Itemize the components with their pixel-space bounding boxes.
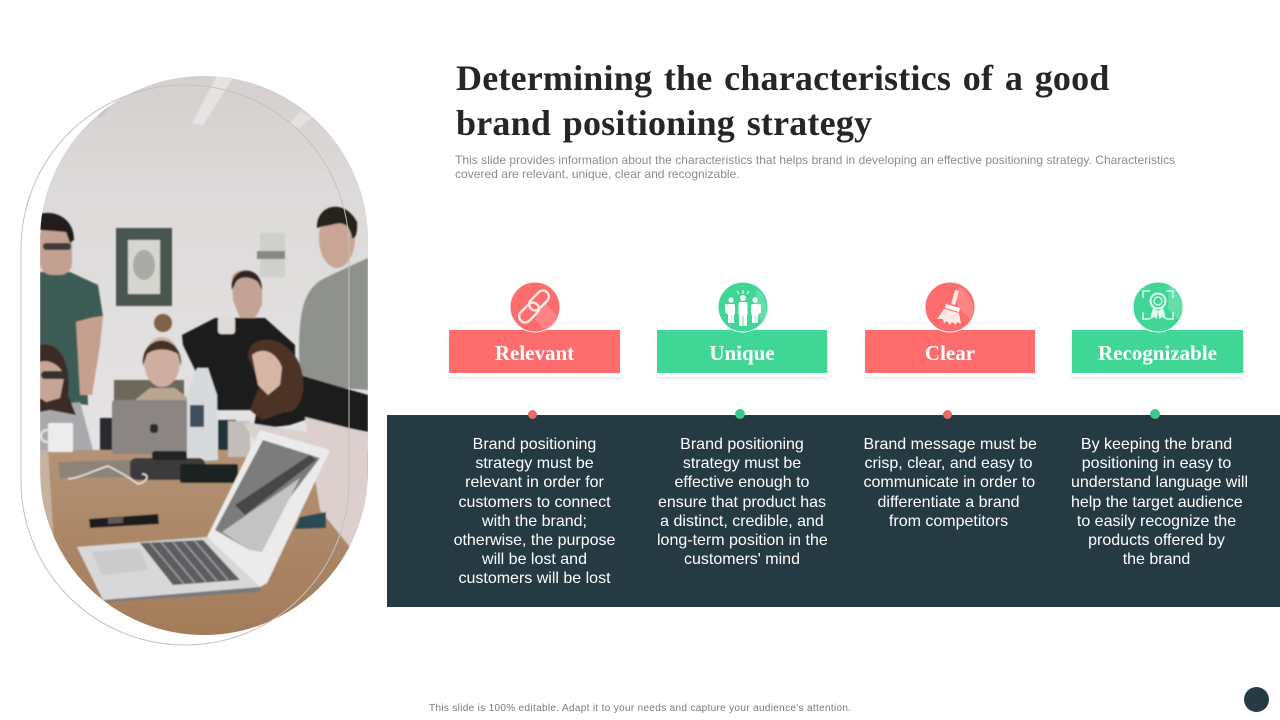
woman left [40,402,93,450]
label: Unique: Unique [709,341,775,365]
marker dot: Clear [942,410,952,418]
title: brand positioning strategy [456,103,872,143]
text: Recognizable description: By keeping the brand [1081,436,1232,453]
marker dot: Recognizable [1150,409,1160,419]
man right [299,258,368,390]
label: Unique [657,330,827,373]
text: Clear description: differentiate a brand [877,494,1020,511]
icon: broom [926,282,974,332]
description: covered are relevant, unique, clear and recognizable. [455,167,740,181]
text: Unique description: Brand positioning [680,436,804,453]
text: Clear description: crisp, clear, and easy to [864,455,1033,472]
label: Clear: Clear [925,341,975,365]
mug and glasses [48,423,73,452]
text: Clear description: Brand message must be [864,436,1037,453]
text: Unique description: ensure that product has [658,494,826,511]
text: Relevant description: will be lost and [482,551,587,568]
back wall items [100,418,112,450]
text: Relevant description: Brand positioning [473,436,596,453]
text: Unique description: long-term position in the [657,532,828,549]
brown-haired woman [253,375,368,432]
icon: three people [718,282,768,332]
text: Relevant description: strategy must be [475,455,594,472]
text: Recognizable description: the brand [1123,551,1190,568]
pink laptop back right [244,422,309,444]
description: This slide provides information about the characteristics that helps brand in developing an effective positioning strategy. Characteristics [455,153,1175,167]
table [40,450,370,640]
label: Relevant [449,330,620,373]
text: Unique description [657,436,828,568]
text: Relevant description: with the brand; [482,513,587,530]
text: Relevant description: relevant in order for [465,474,604,491]
photo: team meeting around a table in a rounded frame [20,76,368,646]
text: Recognizable description: products offered by [1088,532,1225,549]
text: Clear description [864,436,1037,530]
text: Recognizable description: positioning in easy to [1082,455,1231,472]
label: Relevant: Relevant [495,341,574,365]
text: Relevant description [454,436,615,587]
front laptop [77,537,260,600]
title: Determining the characteristics of a good [456,58,1110,98]
woman centre [113,379,185,401]
dark band [387,415,1280,607]
text: Unique description: a distinct, credible, and [660,513,824,530]
text: Recognizable description: help the target audience [1071,494,1243,511]
icon: award ribbon [1134,282,1182,332]
photo outline arc [21,85,349,645]
woman in black [182,318,295,410]
text: Recognizable description: to easily recognize the [1077,513,1236,530]
text: Recognizable description: understand language will [1071,474,1248,491]
label: Recognizable: Recognizable [1098,341,1217,365]
text: Unique description: effective enough to [675,474,809,491]
water bottle [187,368,218,462]
middle laptop [112,400,187,454]
text: Relevant description: customers to connect [458,494,611,511]
icon: chain link [510,282,560,332]
marker dot: Unique [735,409,745,419]
label: Recognizable [1072,330,1243,373]
description [455,153,1175,181]
man left [40,272,103,405]
text: Unique description: strategy must be [683,455,801,472]
navigation dot [1244,687,1269,712]
footer note: This slide is 100% editable. Adapt it to your needs and capture your audience's attention. [429,703,851,714]
text: Relevant description: otherwise, the purpose [454,532,615,549]
label: Clear [865,330,1035,373]
phone [89,514,159,528]
text: Relevant description: customers will be lost [458,570,611,587]
title [456,58,1110,143]
black case [130,458,205,480]
cable [68,466,147,484]
text: Clear description: communicate in order to [864,474,1035,491]
marker dot: Relevant [528,410,537,418]
text: Unique description: customers' mind [684,551,800,568]
text: Clear description: from competitors [889,513,1008,530]
text: Recognizable description [1071,436,1248,568]
